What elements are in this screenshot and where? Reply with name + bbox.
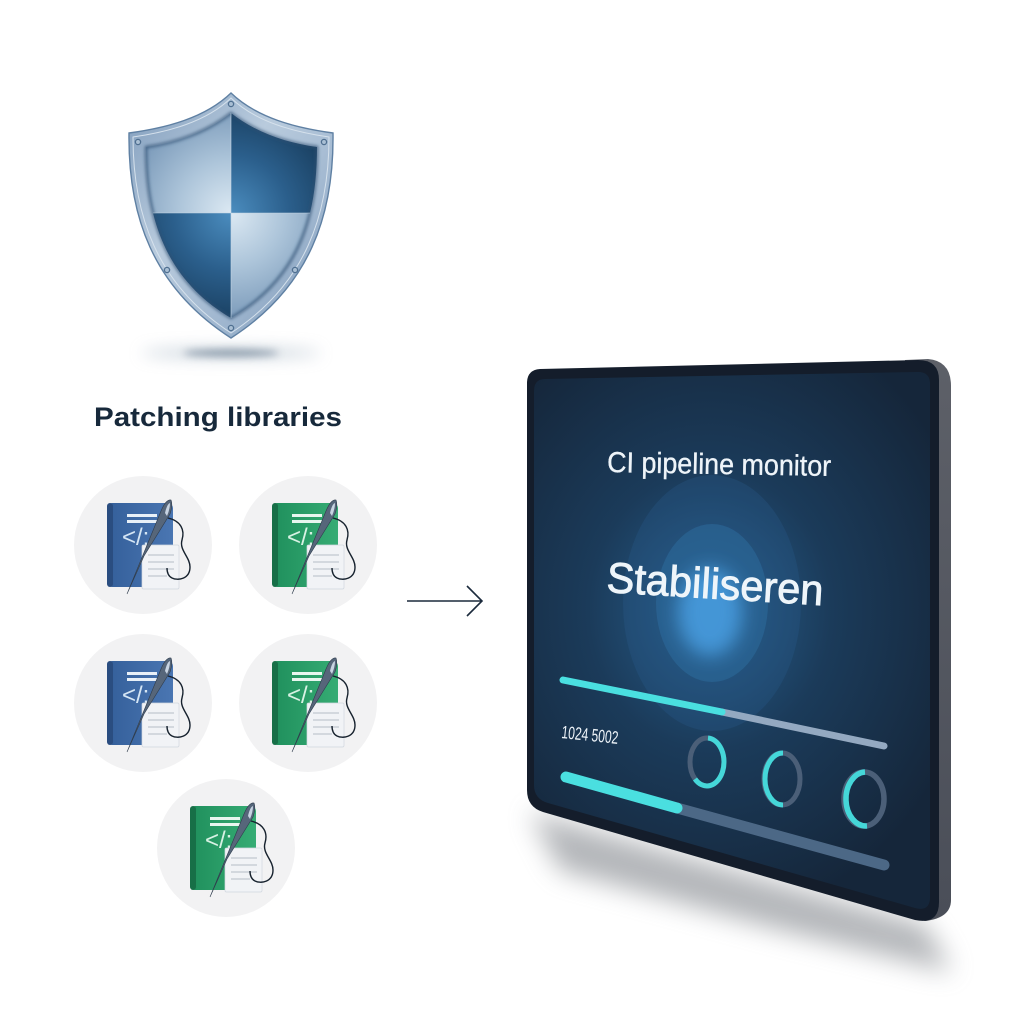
icon: library patch, green, bottom: </: <box>205 827 232 854</box>
shield rim <box>129 93 333 338</box>
progress bar two <box>566 777 884 865</box>
shield ground shadow <box>141 348 321 358</box>
panel: CI pipeline monitor tablet <box>527 359 952 972</box>
ring gauge two <box>764 753 800 805</box>
icon: shield <box>129 93 333 358</box>
icon: library patch, green, middle right: </: <box>287 682 314 709</box>
tablet screen <box>534 372 930 909</box>
icon: library patch, blue, top left <box>74 476 212 614</box>
icon: library patch, green, bottom <box>157 779 295 917</box>
shield rim highlight <box>133 98 329 333</box>
tablet body <box>527 360 939 921</box>
icon: library patch, blue, top left: </: <box>122 524 149 551</box>
heading: Patching libraries: Patching libraries <box>94 402 342 432</box>
shield rivets <box>135 101 327 331</box>
tablet side edge <box>905 359 951 921</box>
title: CI pipeline monitor: CI pipeline monitor <box>607 447 832 483</box>
icon: library patch, green, middle right <box>239 634 377 772</box>
icon: library patch, green, top right: </: <box>287 524 314 551</box>
ring gauge one <box>690 738 724 786</box>
icon: library patch, green, top right <box>239 476 377 614</box>
progress bar one <box>563 680 884 746</box>
arrow <box>407 586 482 616</box>
icon: library patch, blue, middle left: </: <box>122 682 149 709</box>
tablet shadow <box>530 812 952 972</box>
status: Stabiliseren: Stabiliseren <box>605 554 825 615</box>
number label: 1024 5002 <box>561 722 619 748</box>
icon: library patch, blue, middle left <box>74 634 212 772</box>
screen glow rings <box>623 475 801 731</box>
ring gauge three <box>844 772 884 826</box>
shield inner quarters <box>146 113 317 318</box>
